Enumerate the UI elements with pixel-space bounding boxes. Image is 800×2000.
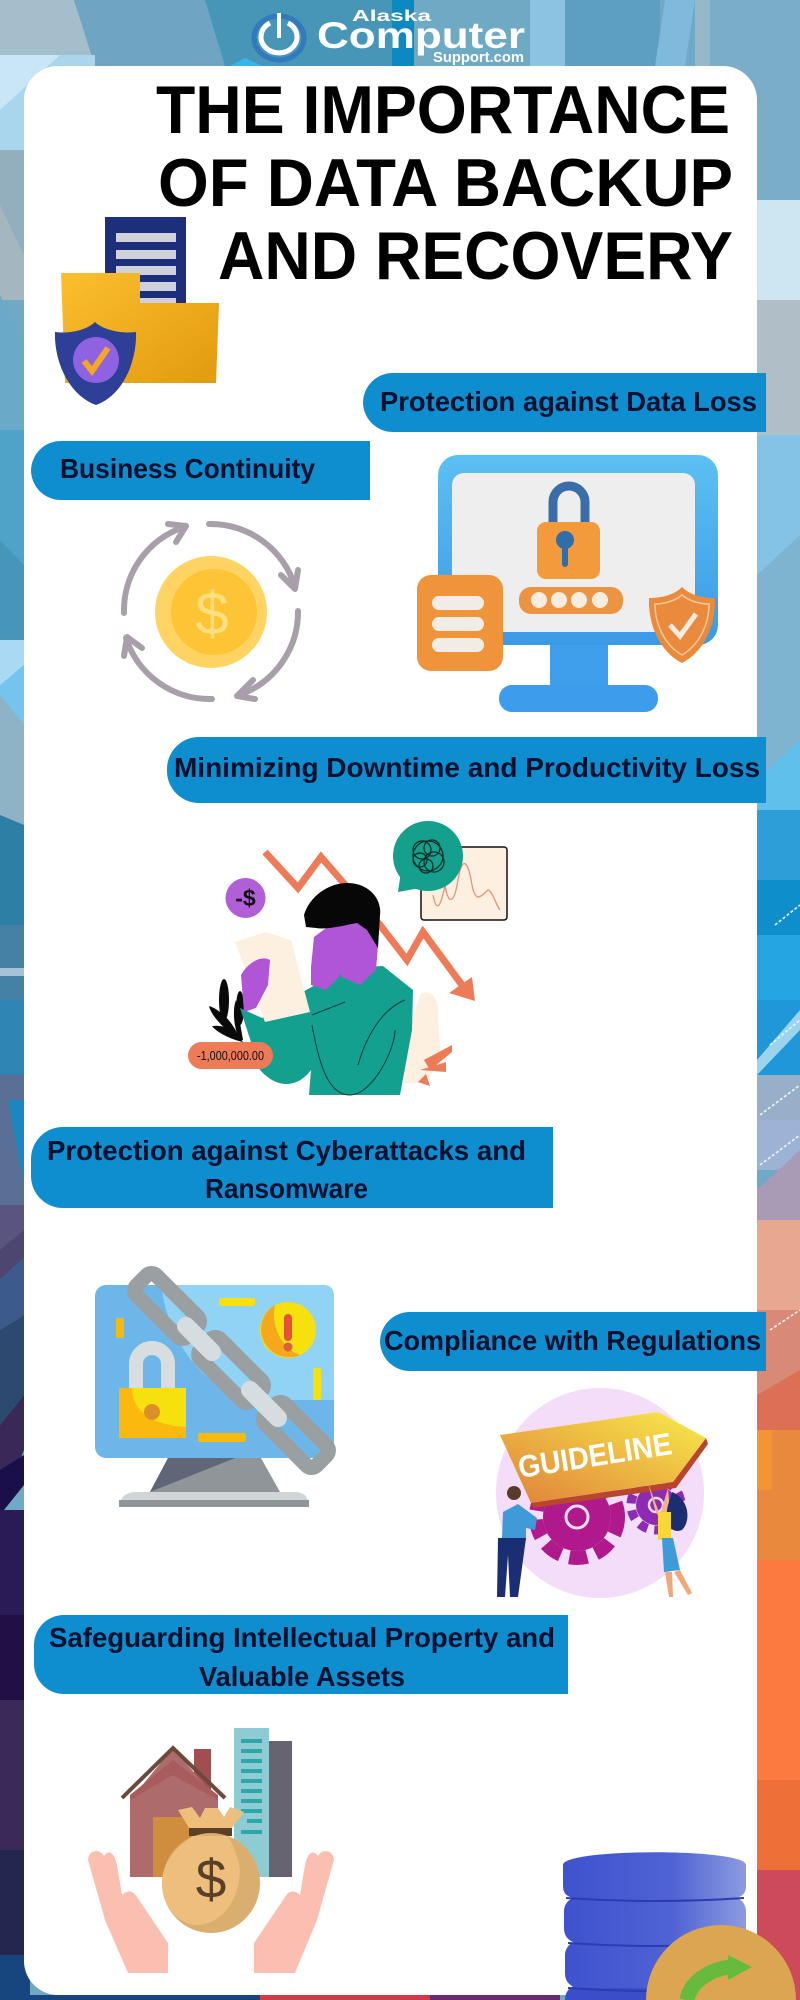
logo: Alaska Computer Support.com: Alaska: [352, 8, 431, 25]
sweater outline: [312, 1000, 405, 1095]
woman: [648, 1483, 692, 1597]
paper held: [235, 932, 310, 1022]
sign: GUIDELINE: [516, 1426, 674, 1485]
hands: [88, 1851, 334, 1973]
gears: [536, 1476, 681, 1558]
teal sweater: [240, 966, 413, 1095]
bar: Minimizing Downtime and Productivity Loss: [167, 737, 766, 803]
face: [322, 912, 378, 985]
bar: Protection against Data Loss: [363, 373, 766, 432]
logo: Alaska Computer Support.com: Computer: [317, 15, 525, 56]
back paper and leaves: [403, 993, 452, 1086]
bar: Protection against Cyberattacks and Ransomware: Protection against Cyberattacks and: [47, 1135, 526, 1166]
bar: Minimizing Downtime and Productivity Loss: Minimizing Downtime and Productivity Loss: [174, 752, 760, 783]
money bag: [162, 1807, 260, 1933]
green arrow: [687, 1955, 752, 2000]
illustration: hands holding money bag, house and towers: [88, 1728, 334, 1973]
screen: [95, 1285, 334, 1458]
database disks: [563, 1852, 746, 2000]
amount pill: [188, 1042, 273, 1069]
amount pill: -1,000,000.00: [197, 1048, 264, 1063]
logo: Alaska Computer Support.com: Support.com: [433, 49, 524, 66]
minus dollar badge: -$: [235, 885, 256, 911]
plant: [209, 979, 244, 1042]
bar: Safeguarding Intellectual Property and Valuable Assets: [34, 1615, 568, 1694]
logo: Alaska Computer Support.com: [254, 8, 525, 66]
speech bubble with scribble: [393, 821, 463, 892]
icon: coin with cycle arrows: [124, 524, 298, 699]
icon: database with recovery arrow: [563, 1852, 796, 2000]
title: THE IMPORTANCE: [156, 72, 730, 148]
padlock: [119, 1348, 186, 1438]
bar: Business Continuity: [31, 441, 370, 500]
illustration: guideline sign with gears: [496, 1388, 708, 1598]
arrow: falling trend: [265, 852, 475, 1001]
bar: Protection against Data Loss: Protection against Data Loss: [380, 386, 757, 417]
stand: [119, 1458, 309, 1507]
hair: [304, 883, 380, 948]
chain: [132, 1271, 331, 1470]
bar: Safeguarding Intellectual Property and Valuable Assets: Safeguarding Intellectual Property and: [49, 1622, 555, 1653]
chart card: [421, 847, 507, 920]
icon: folder with document and shield: [55, 217, 219, 405]
recovery badge: [646, 1925, 796, 2000]
icon: monitor with padlock: [417, 455, 718, 712]
bar: Business Continuity: Business Continuity: [60, 453, 315, 484]
bar: Compliance with Regulations: Compliance with Regulations: [384, 1325, 761, 1356]
title: [156, 72, 733, 294]
money bag: $: [196, 1848, 226, 1910]
icon: coin with cycle arrows: $: [195, 580, 229, 647]
house: [122, 1748, 225, 1877]
dashes: [116, 1298, 321, 1442]
hands: [241, 928, 342, 1012]
bar: Compliance with Regulations: [380, 1312, 766, 1371]
towers: [234, 1728, 292, 1877]
illustration: stressed person with falling chart: [188, 821, 507, 1095]
bar: Protection against Cyberattacks and Ransomware: [31, 1127, 553, 1208]
icon: power symbol: [254, 13, 304, 60]
icon: monitor with broken chain and lock: [95, 1271, 334, 1507]
minus dollar badge: [226, 878, 266, 918]
bar: Safeguarding Intellectual Property and Valuable Assets: Valuable Assets: [199, 1661, 405, 1692]
sign: [500, 1412, 708, 1508]
warning badge: [260, 1302, 316, 1358]
title: OF DATA BACKUP: [158, 145, 733, 221]
title: AND RECOVERY: [218, 218, 733, 294]
bar: Protection against Cyberattacks and Ransomware: Ransomware: [205, 1173, 368, 1204]
man: [497, 1486, 537, 1597]
